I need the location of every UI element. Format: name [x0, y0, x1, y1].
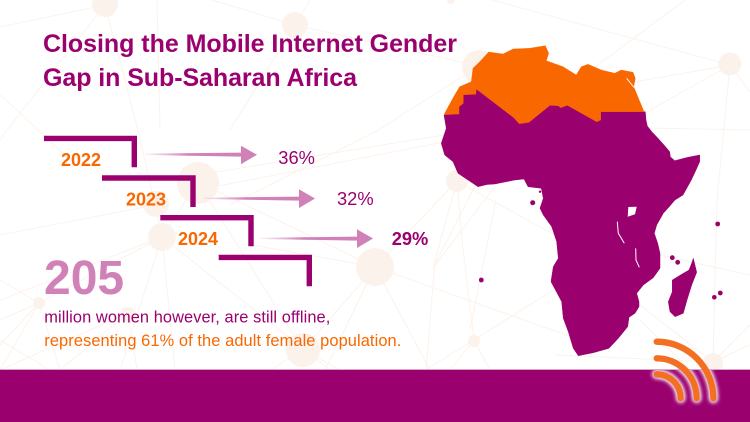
map of Africa — [441, 46, 723, 356]
step 2023 — [102, 178, 193, 210]
arrow to 36% — [145, 146, 257, 164]
step 2023: 2023 — [126, 190, 166, 210]
value 32%: 32% — [337, 188, 374, 209]
big number 205: 205 — [44, 252, 124, 305]
sub-Saharan region — [441, 89, 723, 356]
lakes — [617, 207, 639, 267]
footer bar — [0, 369, 750, 422]
value 36%: 36% — [278, 147, 315, 168]
arrow to 32% — [203, 189, 315, 208]
step 2024 — [160, 218, 251, 249]
title — [43, 30, 457, 92]
staircase timeline — [44, 138, 309, 286]
step 2022: 2022 — [61, 150, 101, 170]
step 2022 — [44, 138, 134, 170]
title: Closing the Mobile Internet Gender — [43, 30, 457, 58]
Red Sea sliver — [627, 78, 634, 88]
population share statement: representing 61% of the adult female population. — [44, 332, 401, 350]
final step — [219, 257, 309, 286]
offline statement: million women however, are still offline, — [44, 308, 330, 326]
signal logo — [657, 342, 713, 398]
title: Gap in Sub-Saharan Africa — [43, 64, 358, 92]
value 29%: 29% — [392, 228, 428, 249]
north Africa region — [444, 46, 644, 124]
step 2024: 2024 — [178, 229, 218, 249]
arrow to 29% — [260, 229, 373, 248]
